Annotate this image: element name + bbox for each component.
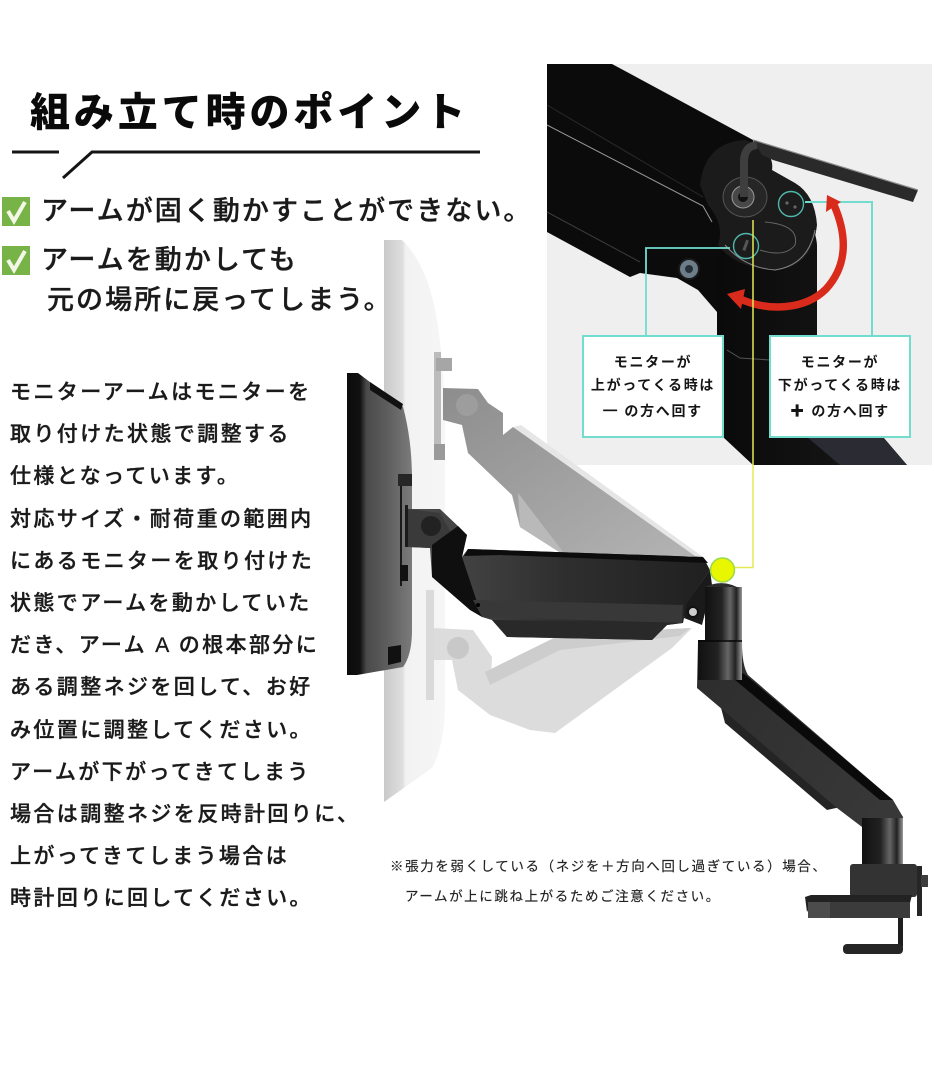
ghost arm: lowered position bbox=[426, 590, 692, 733]
explanatory text: 状態でアームを動かしていた bbox=[10, 592, 312, 615]
ghost arm: raised position bbox=[434, 352, 703, 557]
main upper arm and post bbox=[697, 583, 903, 864]
callout: minus: ━ の方へ回す bbox=[603, 403, 703, 419]
ghost monitor bbox=[384, 240, 445, 802]
detail: upper arm body bbox=[547, 64, 760, 312]
icon: check 1 bbox=[2, 197, 30, 226]
desk clamp bbox=[805, 864, 928, 954]
explanatory text: アームが下がってきてしまう bbox=[10, 761, 311, 784]
callout leader: minus bbox=[646, 248, 730, 335]
explanatory text: モニターアームはモニターを bbox=[10, 381, 311, 404]
title: 組み立て時のポイント bbox=[30, 91, 469, 135]
icon: plus screw marker bbox=[778, 192, 804, 216]
explanatory text: 取り付けた状態で調整する bbox=[10, 423, 291, 446]
explanatory text: だき、アーム A の根本部分に bbox=[10, 634, 319, 657]
checklist item 2: アームを動かしても bbox=[41, 245, 298, 275]
main forearm bbox=[408, 509, 712, 640]
marker: yellow highlight bbox=[710, 558, 734, 582]
callout: minus: 上がってくる時は bbox=[591, 377, 715, 393]
note: ※張力を弱くしている（ネジを＋方向へ回し過ぎている）場合、 bbox=[390, 859, 828, 874]
checklist item 2: 元の場所に戻ってしまう。 bbox=[47, 285, 393, 315]
checklist item 2 bbox=[41, 245, 393, 315]
arrow: red rotation arrow bbox=[727, 195, 843, 309]
callout: minus bbox=[582, 335, 724, 438]
icon: check 2 bbox=[2, 246, 30, 275]
callout: plus: モニターが bbox=[801, 354, 879, 370]
callout: minus: モニターが bbox=[614, 354, 692, 370]
explanatory text: 仕様となっています。 bbox=[10, 465, 240, 488]
detail: pivot cap and socket bbox=[700, 140, 817, 270]
connector line bbox=[733, 220, 753, 568]
detail: vertical post bbox=[717, 210, 907, 465]
explanatory text: にあるモニターを取り付けた bbox=[10, 550, 314, 573]
explanatory text: み位置に調整してください。 bbox=[10, 719, 313, 742]
callout: plus bbox=[769, 335, 911, 438]
panel: adjustment screw detail bbox=[547, 64, 932, 465]
note continuation: アームが上に跳ね上がるためご注意ください。 bbox=[405, 889, 721, 904]
explanatory text: 時計回りに回してください。 bbox=[10, 887, 313, 910]
callout: plus: 下がってくる時は bbox=[778, 377, 902, 393]
callout leader: plus bbox=[805, 202, 872, 335]
heading underline bbox=[12, 152, 480, 178]
detail: bolt bbox=[679, 259, 699, 279]
main monitor bbox=[347, 373, 412, 675]
explanatory text: 場合は調整ネジを反時計回りに、 bbox=[10, 803, 360, 826]
icon: minus screw marker bbox=[734, 234, 758, 258]
checklist item 1: アームが固く動かすことができない。 bbox=[41, 196, 532, 226]
explanatory text: 上がってきてしまう場合は bbox=[10, 845, 289, 868]
explanatory text bbox=[10, 381, 360, 910]
icon: hex key bbox=[744, 140, 918, 202]
callout: plus: ✚ の方へ回す bbox=[790, 403, 890, 419]
explanatory text: 対応サイズ・耐荷重の範囲内 bbox=[10, 508, 314, 531]
explanatory text: ある調整ネジを回して、お好 bbox=[10, 676, 313, 699]
